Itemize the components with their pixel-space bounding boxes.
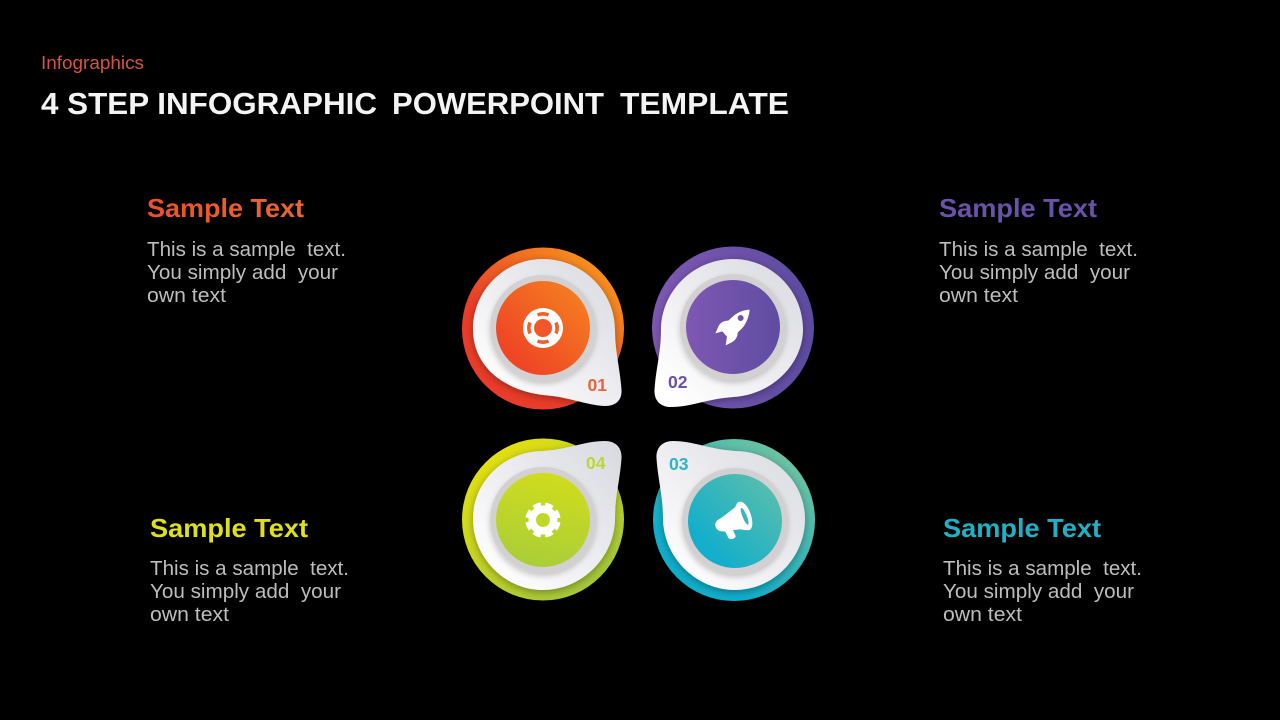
text block: step 3: This is a sample text. [943,558,1142,580]
title: TEMPLATE [620,86,789,121]
icon: rocket [715,310,750,345]
number 01: 01 [588,375,607,395]
icon: megaphone [715,502,752,539]
number 04: 04 [586,453,606,473]
title [41,86,789,121]
text block: step 1: Sample Text [147,193,304,223]
text block: step 3: own text [943,604,1022,626]
text block: step 3: Sample Text [943,513,1101,543]
text block: step 4 [150,513,349,626]
number 03: 03 [669,454,689,474]
text block: step 3 [943,513,1142,626]
icon: lifebuoy [523,308,563,348]
text block: step 1: This is a sample text. [147,239,346,261]
text block: step 2: own text [939,285,1018,307]
text block: step 2: This is a sample text. [939,239,1138,261]
text block: step 4: Sample Text [150,513,308,543]
text block: step 1 [147,193,346,307]
icon: gear [527,504,559,536]
title: 4 STEP INFOGRAPHIC [41,86,377,121]
text block: step 2: You simply add your [939,262,1130,284]
number 02: 02 [668,372,688,392]
step 2 badge [652,246,814,408]
text block: step 2: Sample Text [939,193,1097,223]
subtitle: Infographics [41,53,144,73]
step 4 badge [462,438,624,600]
title: POWERPOINT [392,86,604,121]
step 3 badge [653,439,815,601]
text block: step 4: This is a sample text. [150,558,349,580]
text block: step 3: You simply add your [943,581,1134,603]
text block: step 1: You simply add your [147,262,338,284]
text block: step 2 [939,193,1138,307]
text block: step 4: You simply add your [150,581,341,603]
text block: step 4: own text [150,604,229,626]
text block: step 1: own text [147,285,226,307]
step 1 badge [462,248,624,410]
